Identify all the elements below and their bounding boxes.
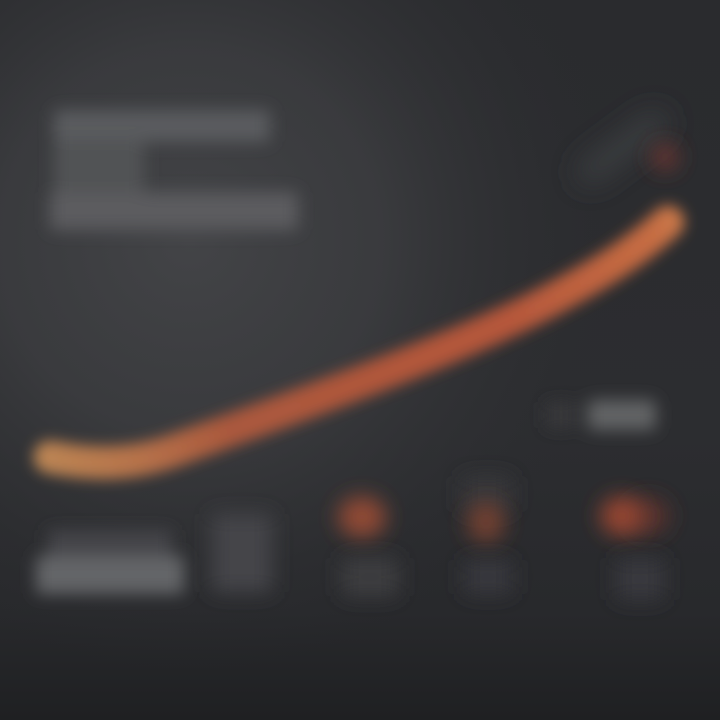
bottom secondary statistic <box>212 514 272 592</box>
rising trend curve <box>50 222 668 463</box>
icon: small trend arrow <box>590 124 679 172</box>
bottom left statistic <box>36 530 184 594</box>
metric 2 icon and label <box>462 476 512 594</box>
value label <box>546 400 656 430</box>
metric 1 icon and label <box>338 496 398 596</box>
metric 3 icon and label <box>600 496 670 600</box>
title block <box>50 110 298 230</box>
